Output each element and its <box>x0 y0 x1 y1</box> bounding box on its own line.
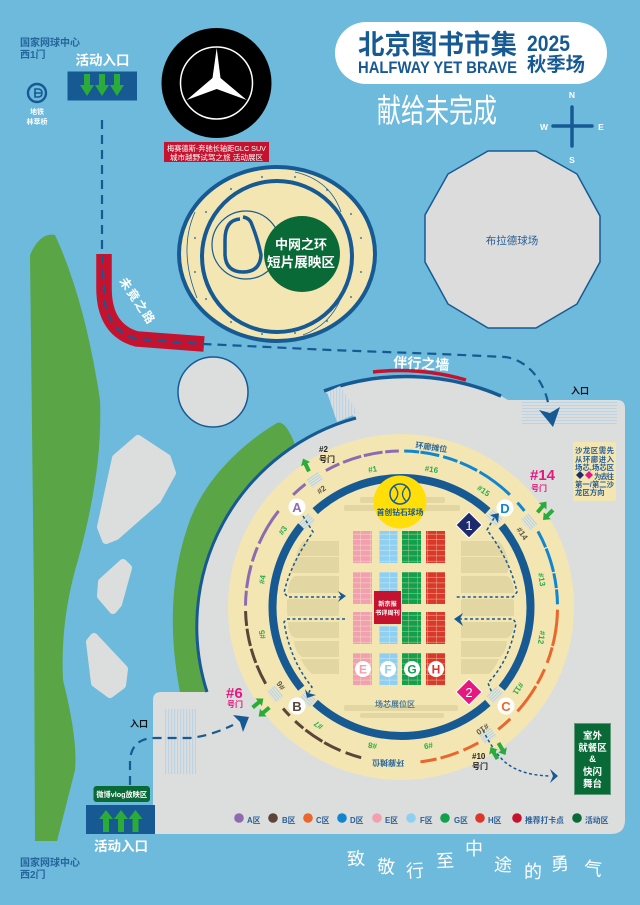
south-west entrance stripes <box>164 709 196 774</box>
seat numbers: #2 <box>315 483 328 496</box>
compass: W <box>540 122 549 132</box>
outdoor dining box: 就餐区 <box>578 742 607 754</box>
east entrance stripes <box>522 402 617 426</box>
dashed route top <box>102 120 549 408</box>
bottom slogan: 途 <box>493 855 513 875</box>
diamond 2 <box>456 679 482 705</box>
seat numbers: #9 <box>423 740 434 751</box>
legend: C区 <box>316 816 330 825</box>
zone badges A B C D: A <box>292 500 302 515</box>
ring screen area <box>179 167 375 341</box>
gate 6 label <box>226 685 243 709</box>
green belt by stadium <box>173 423 300 692</box>
south-west entrance label: 入口 <box>130 719 148 729</box>
Mercedes logo <box>162 28 272 138</box>
venue outer wall <box>197 376 501 692</box>
seat numbers: #8 <box>367 740 378 751</box>
seat numbers: #16 <box>424 464 439 475</box>
salon note card: 第一/第二沙 <box>575 480 615 489</box>
zone badges A B C D <box>288 498 514 714</box>
legend: 活动区 <box>585 815 609 825</box>
title pill: HALFWAY YET BRAVE <box>358 59 517 77</box>
gate label west 2: 国家网球中心 <box>20 856 80 869</box>
compass <box>540 90 604 165</box>
seat numbers: #13 <box>536 572 547 587</box>
seat numbers: #6 <box>274 679 287 692</box>
gate label west 1 <box>20 36 80 61</box>
corridor labels <box>372 440 448 768</box>
grey rocks <box>90 439 172 694</box>
Beijing News book review booth <box>374 591 401 624</box>
bottom slogan: 致 <box>347 849 366 869</box>
diamond 1 <box>456 512 482 538</box>
gate 6 label: 号门 <box>227 699 243 709</box>
ring screen badge <box>264 216 340 292</box>
book stalls E pink <box>353 531 372 685</box>
gate 2 label <box>319 445 335 464</box>
bottom slogan: 中 <box>465 839 483 859</box>
inner dashed routes <box>284 516 550 776</box>
ring screen badge: 中网之环 <box>275 237 327 252</box>
outdoor dining box: 室外 <box>583 730 602 742</box>
book stalls H red <box>426 531 445 685</box>
zone badges E F G H <box>355 661 444 677</box>
navigation arrowheads <box>233 407 560 783</box>
slogan handwritten: 献给未完成 <box>377 94 497 130</box>
green belt left <box>30 235 100 841</box>
subway icon and label <box>26 84 48 126</box>
gate 10 label: 号门 <box>472 761 488 771</box>
legend: 推荐打卡点 <box>525 815 564 825</box>
zone badges E F G H: F <box>384 662 392 676</box>
ring screen badge: 短片展映区 <box>267 254 335 270</box>
salon note card: 沙龙区需先 <box>575 446 615 455</box>
title pill: 北京图书市集 <box>358 30 517 60</box>
outdoor dining box: 快闪 <box>583 766 602 778</box>
wall label: 伴行之墙 <box>393 354 450 373</box>
red road <box>104 254 204 344</box>
gate label west 1: 国家网球中心 <box>20 36 80 49</box>
gate 10 label <box>472 752 488 771</box>
salon note card: 场芯,场芯区 <box>575 463 615 472</box>
zone badges E F G H: H <box>432 662 440 676</box>
corridor labels: 环廊摊位 <box>415 440 448 454</box>
central field label: 场芯展位区 <box>375 699 415 709</box>
Brad court: 布拉德球场 <box>486 234 538 247</box>
salon note card <box>573 442 616 501</box>
legend: D区 <box>350 816 364 825</box>
seat numbers: #4 <box>257 574 268 585</box>
south-west dashed route <box>130 725 233 785</box>
seat numbers: #11 <box>510 681 525 697</box>
gate 10 label: #10 <box>472 752 486 761</box>
gate 14 label: #14 <box>530 467 556 484</box>
grey venue ground <box>153 376 625 834</box>
gate green arrows <box>249 457 556 762</box>
vlog label: 微博vlog放映区 <box>96 790 147 799</box>
bottom slogan <box>347 839 603 882</box>
east entrance label: 入口 <box>571 386 589 396</box>
Mercedes red label <box>164 142 269 162</box>
outdoor dining box: & <box>589 754 596 765</box>
seat numbers: #12 <box>536 630 547 645</box>
legend: G区 <box>454 816 468 825</box>
bottom activity entrance: 活动入口 <box>94 838 148 854</box>
seat numbers: #15 <box>475 483 492 499</box>
seat numbers <box>257 464 547 751</box>
Mercedes red label: 城市越野试驾之旅 活动展区 <box>170 152 264 162</box>
seat numbers: #5 <box>257 629 268 640</box>
gate 6 label: #6 <box>226 685 243 702</box>
top activity entrance: 活动入口 <box>76 52 130 68</box>
bottom slogan: 行 <box>405 860 425 882</box>
gate label west 2: 西2门 <box>20 868 46 881</box>
title pill <box>335 22 607 84</box>
gate stripes <box>267 472 537 744</box>
seat numbers: #3 <box>277 524 290 537</box>
legend: A区 <box>247 816 261 825</box>
salon note card: 为去往 <box>594 472 615 481</box>
gate 2 label: 号门 <box>319 454 335 464</box>
corridor stall ring <box>246 451 558 763</box>
grey round building <box>178 357 248 427</box>
gate label west 2 <box>20 856 80 881</box>
seat numbers: #1 <box>367 464 378 475</box>
legend: E区 <box>385 816 398 825</box>
title pill: 2025 <box>527 31 570 56</box>
corridor labels: 环廊摊位 <box>372 758 404 768</box>
Beijing News book review booth: 书评周刊 <box>375 609 400 617</box>
bottom activity entrance <box>86 805 155 854</box>
zone badges A B C D: B <box>292 699 302 714</box>
stadium cream base <box>228 434 574 780</box>
gate 14 label: 号门 <box>531 483 547 493</box>
salon note card: 龙区方向 <box>575 488 605 497</box>
book stalls G green <box>402 531 421 685</box>
gate label west 1: 西1门 <box>20 48 46 61</box>
outdoor dining box <box>574 724 610 794</box>
outdoor dining box: 舞台 <box>583 778 602 790</box>
route label: 未竟之路 <box>117 274 159 327</box>
stadium blue ring <box>272 478 530 736</box>
Beijing News book review booth: 新京报 <box>378 600 398 608</box>
Brad court <box>425 151 600 328</box>
Mercedes red label: 梅赛德斯-奔驰长轴距GLC SUV <box>167 143 267 153</box>
zone badges E F G H: G <box>407 662 417 676</box>
legend: F区 <box>420 816 433 825</box>
legend: B区 <box>282 816 296 825</box>
bottom slogan: 的 <box>524 862 542 882</box>
subway icon and label: 地铁 <box>30 107 44 116</box>
book stalls F blue <box>379 531 398 685</box>
subway icon and label: 林萃桥 <box>26 117 48 126</box>
zone badges A B C D: C <box>501 699 511 714</box>
top activity entrance <box>68 52 137 100</box>
seat numbers: #10 <box>474 722 490 737</box>
bottom slogan: 至 <box>436 851 455 871</box>
compass: E <box>598 122 604 132</box>
zone badges A B C D: D <box>500 501 510 516</box>
tennis court badge: 首创钻石球场 <box>377 507 424 517</box>
bottom slogan: 敬 <box>376 856 396 878</box>
seat numbers: #14 <box>515 526 530 542</box>
vlog label <box>94 786 150 802</box>
compass: N <box>569 90 575 100</box>
seat numbers: #7 <box>312 718 325 731</box>
bottom slogan: 气 <box>583 858 603 880</box>
zone badges E F G H: E <box>359 662 367 676</box>
compass: S <box>569 155 575 165</box>
bottom slogan: 勇 <box>551 854 570 874</box>
tennis court badge <box>374 476 426 528</box>
diamond 1: 1 <box>465 518 473 533</box>
salon note card: 从环廊进入 <box>575 455 615 464</box>
diamond 2: 2 <box>465 685 473 700</box>
north-west gate stripes <box>327 386 358 422</box>
stall blocks sides <box>287 497 514 718</box>
legend <box>234 813 609 825</box>
gate 14 label <box>530 467 556 493</box>
legend: H区 <box>488 816 502 825</box>
gate 2 label: #2 <box>319 445 328 454</box>
title pill: 秋季场 <box>527 54 585 76</box>
red wall segment <box>373 371 466 380</box>
